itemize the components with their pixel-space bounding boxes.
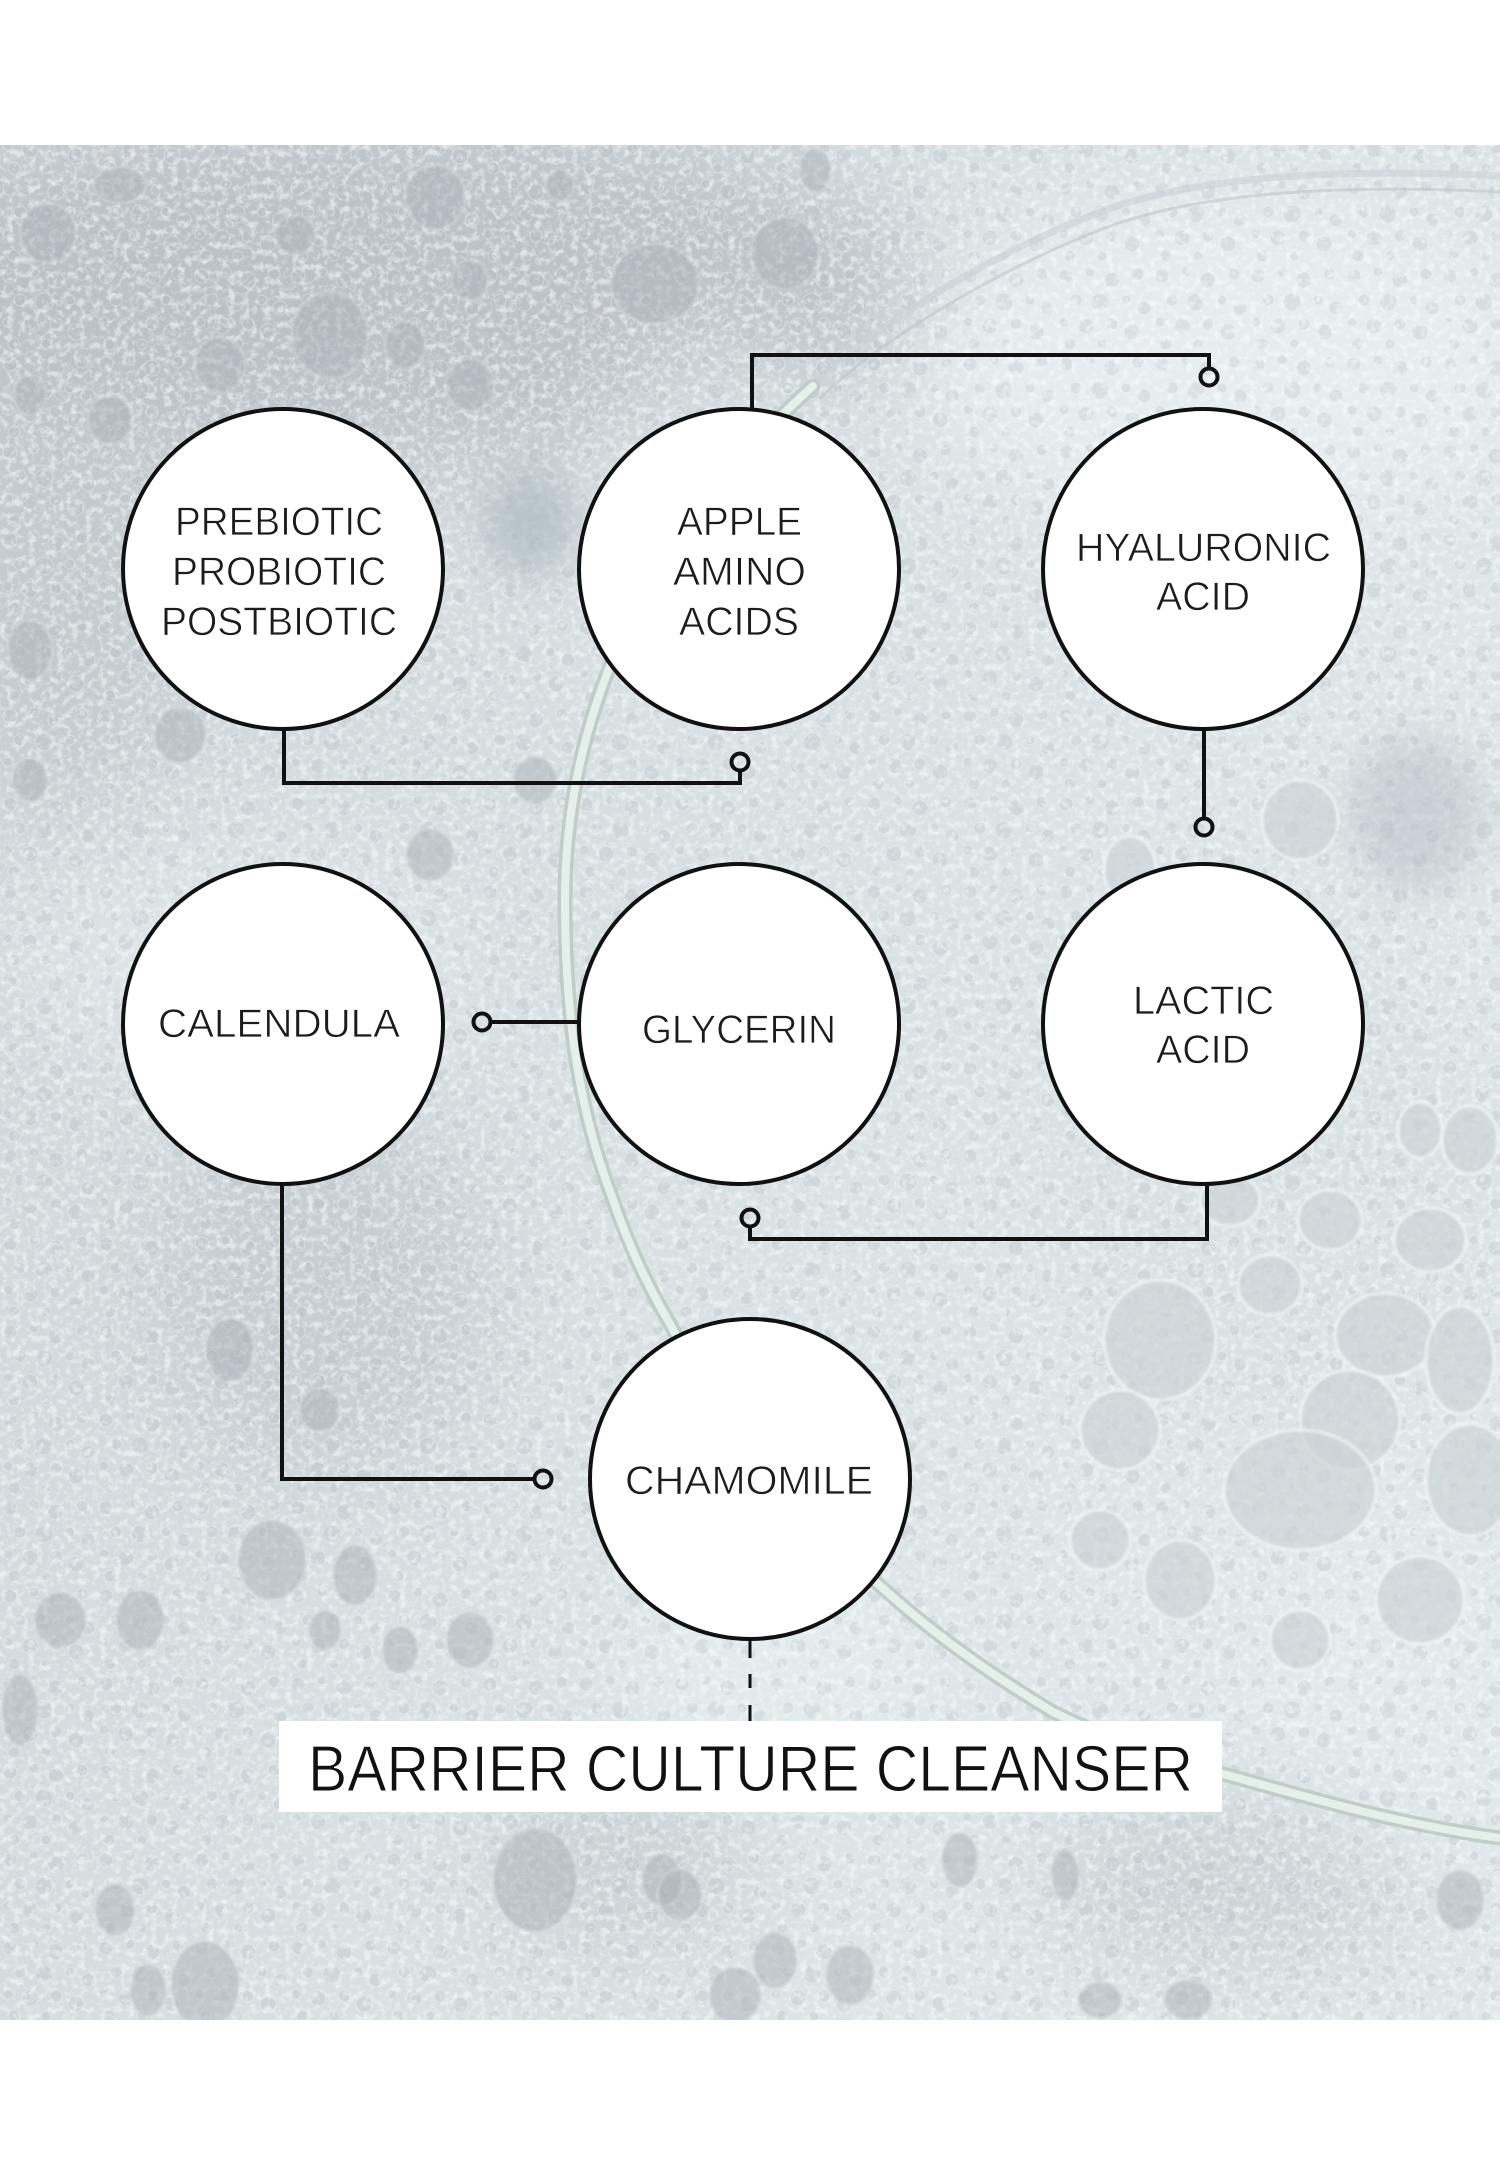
node: prebiotic probiotic postbiotic: PREBIOTIC bbox=[175, 500, 383, 544]
node: chamomile bbox=[590, 1319, 910, 1639]
connector: prebiotic to apple amino acids bbox=[284, 730, 748, 783]
node: hyaluronic acid bbox=[1043, 409, 1363, 729]
node: hyaluronic acid: ACID bbox=[1156, 575, 1250, 619]
node: calendula: CALENDULA bbox=[158, 1002, 400, 1046]
connector: calendula to chamomile bbox=[282, 1185, 552, 1488]
node: apple amino acids: ACIDS bbox=[679, 600, 799, 644]
node: glycerin: GLYCERIN bbox=[642, 1008, 836, 1052]
node: lactic acid: LACTIC bbox=[1133, 979, 1274, 1023]
node: prebiotic probiotic postbiotic bbox=[123, 409, 443, 729]
node: prebiotic probiotic postbiotic: POSTBIOTIC bbox=[161, 600, 397, 644]
node: apple amino acids bbox=[579, 409, 899, 729]
connector: chamomile dashed line to product label bbox=[748, 1640, 752, 1721]
connector: hyaluronic acid to lactic acid bbox=[1196, 730, 1212, 836]
node: apple amino acids: APPLE bbox=[677, 500, 802, 544]
node: prebiotic probiotic postbiotic: PROBIOTIC bbox=[172, 550, 386, 594]
node: hyaluronic acid: HYALURONIC bbox=[1076, 526, 1331, 570]
glass dish rim bbox=[565, 173, 1500, 1838]
node: lactic acid bbox=[1043, 864, 1363, 1184]
large bubbles: pale, right side bbox=[1070, 780, 1500, 1670]
connector: lactic acid to glycerin bbox=[742, 1185, 1207, 1239]
connector: apple amino acids to hyaluronic acid bbox=[752, 355, 1218, 408]
node: lactic acid: ACID bbox=[1156, 1028, 1250, 1072]
node: apple amino acids: AMINO bbox=[673, 550, 806, 594]
node: glycerin bbox=[579, 864, 899, 1184]
connector: glycerin to calendula bbox=[474, 1014, 579, 1030]
node: calendula bbox=[123, 864, 443, 1184]
product label: barrier culture cleanser: BARRIER CULTURE CLEANSER bbox=[308, 1732, 1193, 1805]
node: chamomile: CHAMOMILE bbox=[625, 1459, 873, 1503]
